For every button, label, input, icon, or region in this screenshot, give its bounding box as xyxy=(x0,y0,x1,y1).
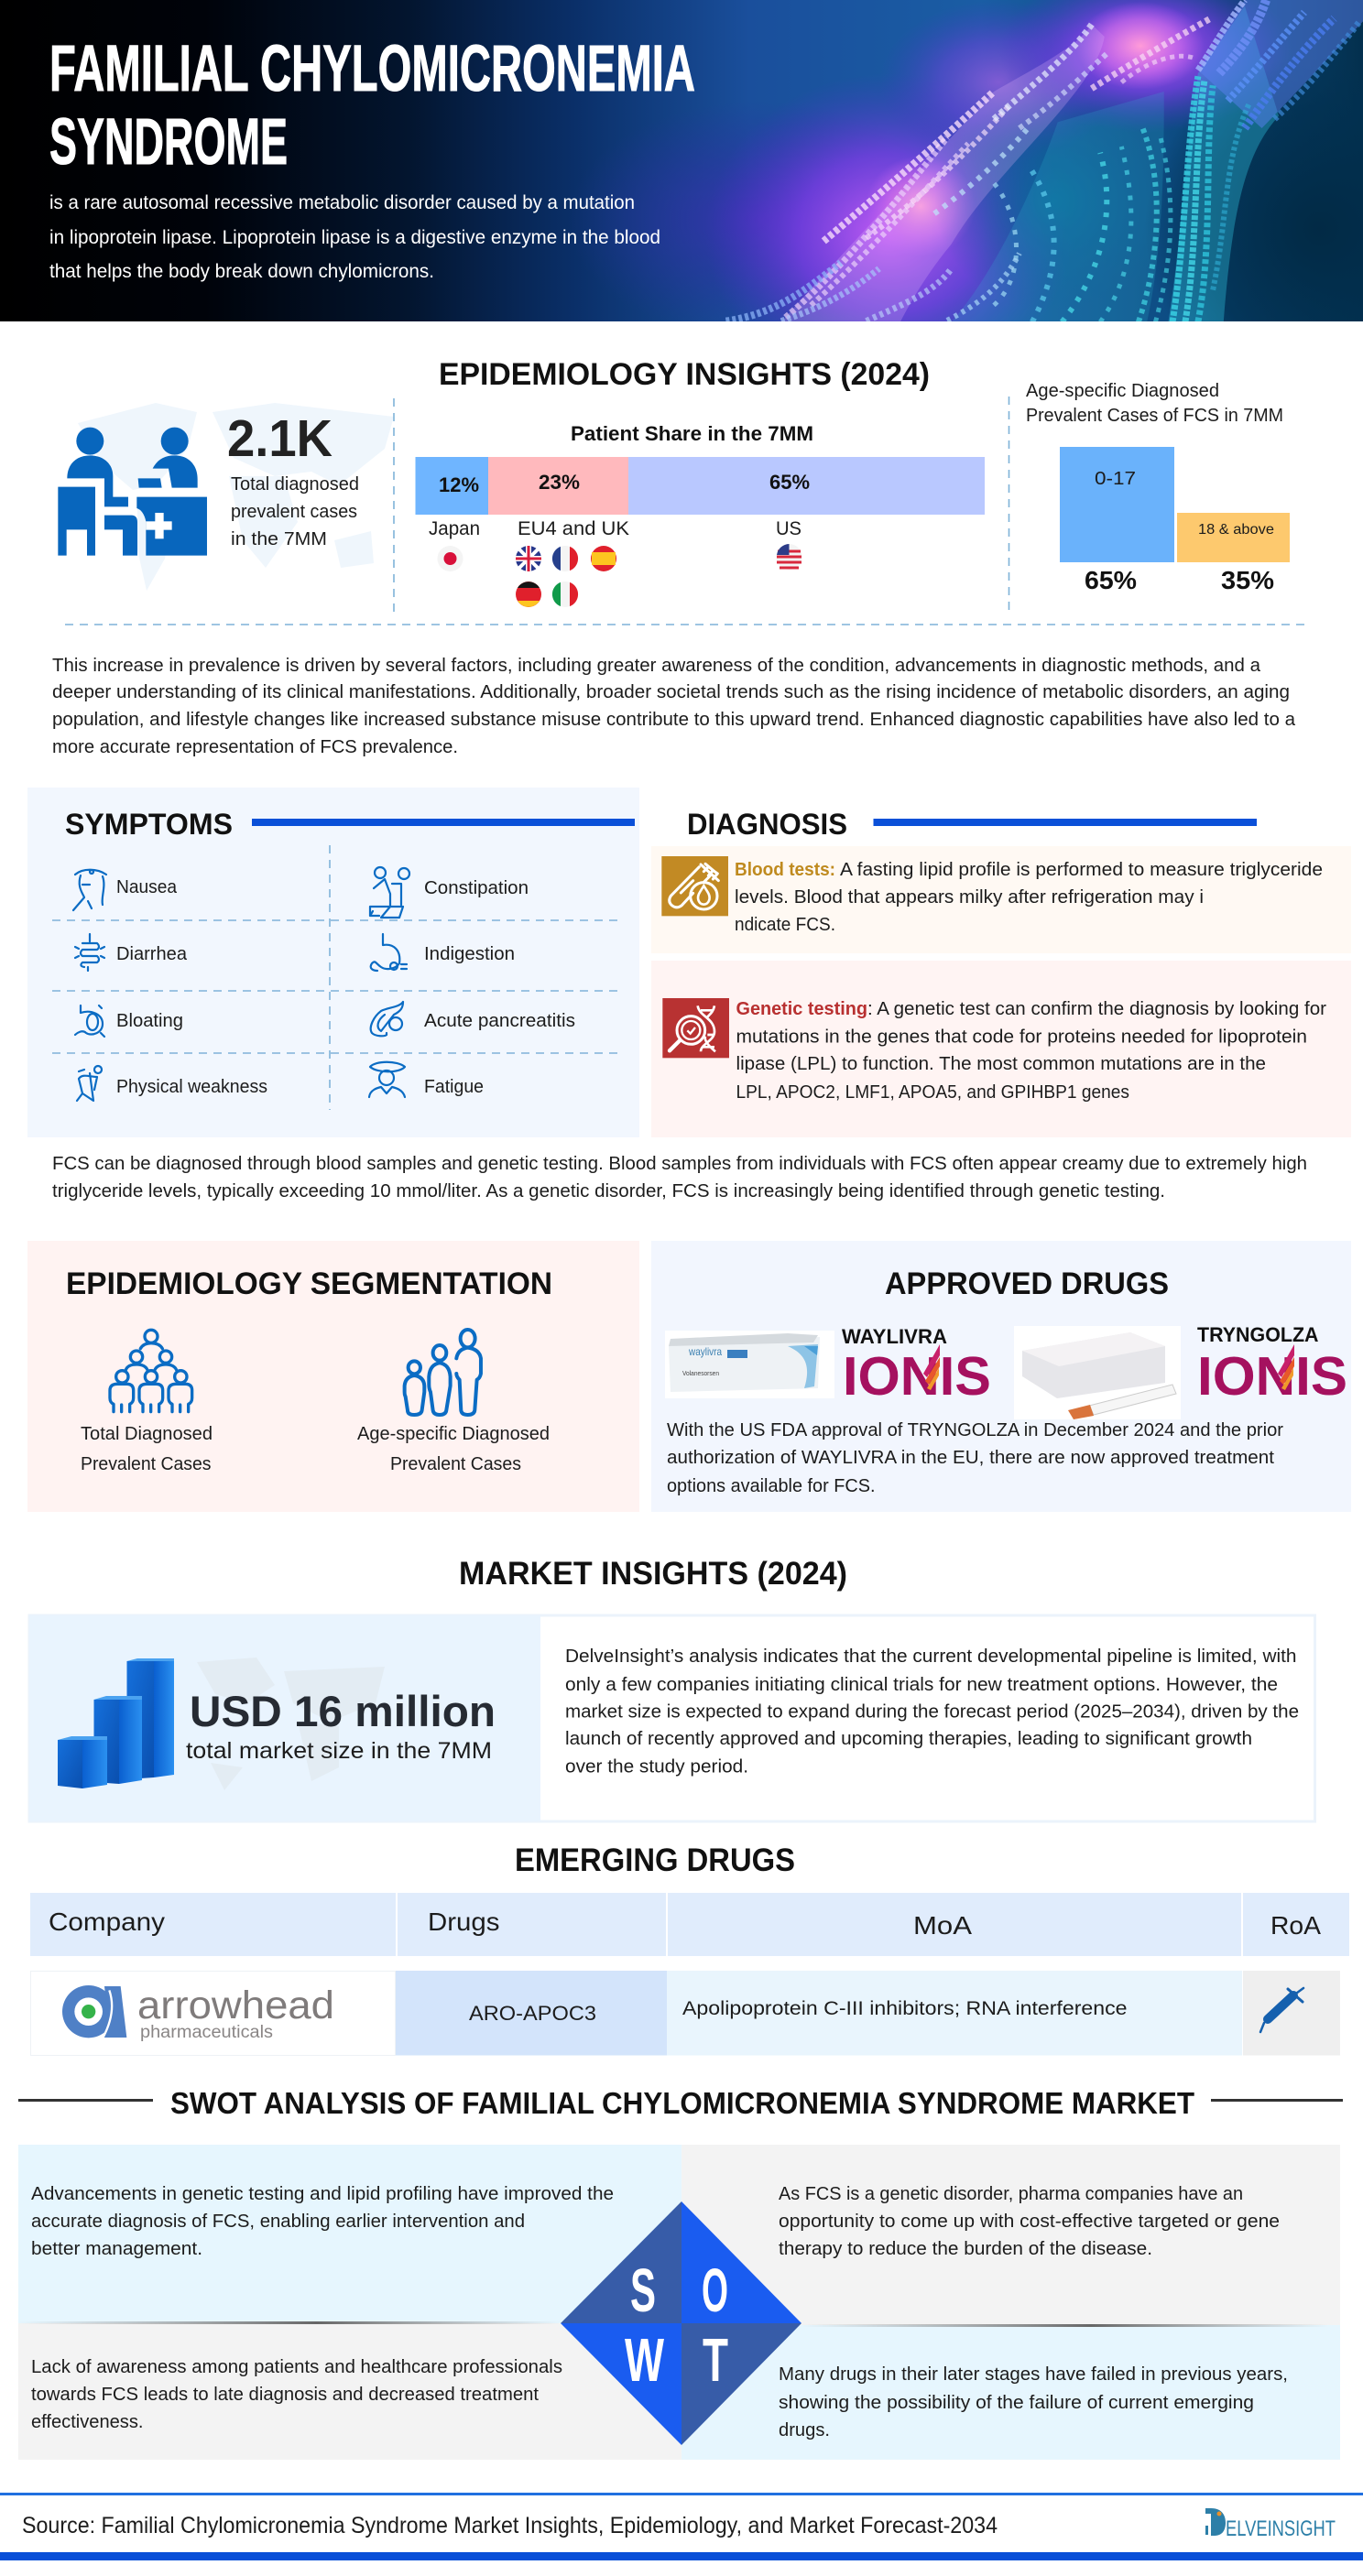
text: opportunities xyxy=(779,2184,1280,2259)
region labels: Japan xyxy=(429,518,480,539)
world map background xyxy=(197,1658,385,1790)
icon: syringe xyxy=(1260,1988,1303,2032)
table header: Drugs xyxy=(428,1908,500,1936)
text: weaknesses xyxy=(31,2357,562,2432)
logo: arrowhead xyxy=(62,1984,334,2042)
symptom: diarrhea xyxy=(75,934,188,971)
stat label: prevalent cases xyxy=(231,502,357,522)
intro text: is a rare autosomal recessive metabolic disorder caused by a mutation xyxy=(49,192,635,213)
text: threats xyxy=(779,2364,1288,2440)
text block: FCS diagnosis: triglyceride levels, typically exceeding 10 mmol/liter. As a genetic disorder, FCS is increasingly being identified through genetic testing. xyxy=(52,1181,1165,1201)
symptom: physical weakness xyxy=(77,1066,267,1101)
stacked bar: 23% xyxy=(539,471,580,494)
icon: doctor and patient at desk xyxy=(58,428,207,556)
bar chart: 0-17 xyxy=(1095,469,1136,489)
stacked bar: 12% xyxy=(439,473,479,496)
text: drug name: ARO-APOC3 xyxy=(469,2002,596,2025)
footer xyxy=(0,2493,1363,2560)
source line: Source: Familial Chylomicronemia Syndrome Market Insights, Epidemiology, and Market Forecast-2034 xyxy=(22,2513,998,2538)
symptom: constipation: Constipation xyxy=(424,878,529,898)
symptom: diarrhea: Diarrhea xyxy=(116,944,188,964)
bar chart: 18 & above xyxy=(1198,522,1274,538)
title: SYNDROME xyxy=(49,106,288,179)
title: FAMILIAL CHYLOMICRONEMIA xyxy=(49,33,695,105)
table row xyxy=(31,1971,1340,2055)
heading: age-specific: Age-specific Diagnosed xyxy=(1026,381,1219,401)
icon: blood test tube xyxy=(661,856,728,916)
text: threats: drugs. xyxy=(779,2420,830,2440)
intro text: in lipoprotein lipase. Lipoprotein lipase is a digestive enzyme in the blood xyxy=(49,227,660,248)
symptom: fatigue: Fatigue xyxy=(424,1077,484,1097)
drug: tryngolza box xyxy=(1014,1326,1181,1419)
SWOT diamond: O xyxy=(702,2256,728,2325)
heading: epidemiology insights: EPIDEMIOLOGY INSIGHTS (2024) xyxy=(439,357,930,392)
heading: SWOT analysis: SWOT ANALYSIS OF FAMILIAL CHYLOMICRONEMIA SYNDROME MARKET xyxy=(170,2086,1194,2120)
text: strengths: better management. xyxy=(31,2239,202,2259)
text block: prevalence drivers xyxy=(52,656,1296,757)
text: threats: Many drugs in their later stages have failed in previous years, xyxy=(779,2364,1288,2385)
icon: flag Italy xyxy=(552,582,578,607)
stat label: Total diagnosed xyxy=(231,474,359,495)
stat label: in the 7MM xyxy=(231,529,327,549)
text: genetic testing: LPL, APOC2, LMF1, APOA5, and GPIHBP1 genes xyxy=(736,1082,1129,1103)
panel: symptoms xyxy=(27,788,639,1137)
drug: waylivra box: Volanesorsen xyxy=(682,1371,719,1377)
region labels: EU4 and UK xyxy=(518,518,629,539)
heading: patient share: Patient Share in the 7MM xyxy=(571,422,813,445)
SWOT diamond: T xyxy=(703,2326,728,2395)
heading: emerging drugs: EMERGING DRUGS xyxy=(515,1842,795,1878)
panel: age-specific cases xyxy=(1026,381,1290,594)
heading: diagnosis: DIAGNOSIS xyxy=(687,808,847,841)
stat label: total market size in the 7MM xyxy=(186,1738,492,1764)
icon: DNA magnifier xyxy=(662,998,729,1058)
logo: ionis: IONIS xyxy=(1197,1346,1347,1407)
text: blood tests xyxy=(735,860,1323,935)
text block: FCS diagnosis xyxy=(52,1154,1307,1201)
label: age-specific diagnosed xyxy=(357,1424,550,1474)
panel: total diagnosed prevalent cases xyxy=(58,403,394,591)
text: strengths: Advancements in genetic testing and lipid profiling have improved the xyxy=(31,2184,614,2204)
text: tryngolza: TRYNGOLZA xyxy=(1197,1323,1319,1346)
region labels xyxy=(429,518,801,539)
text: blood tests: Blood tests: xyxy=(735,860,835,880)
stat: USD 16 million: USD 16 million xyxy=(190,1687,496,1735)
symptom: indigestion: Indigestion xyxy=(424,944,515,964)
label: age-specific diagnosed: Age-specific Diagnosed xyxy=(357,1424,550,1444)
text: threats: showing the possibility of the failure of current emerging xyxy=(779,2393,1254,2413)
text: market analysis: market size is expected to expand during the forecast period (2025–2034), driven by the xyxy=(565,1701,1299,1722)
icon: 3D bar chart xyxy=(58,1658,174,1788)
bottom bar xyxy=(0,2552,1363,2560)
symptom: bloating: Bloating xyxy=(116,1011,183,1031)
symptom: nausea xyxy=(73,870,178,910)
text: market analysis xyxy=(565,1647,1299,1777)
text: waylivra: WAYLIVRA xyxy=(842,1325,947,1348)
table header: RoA xyxy=(1270,1911,1321,1940)
label: age-specific diagnosed: Prevalent Cases xyxy=(390,1454,521,1474)
label: total diagnosed xyxy=(81,1424,213,1474)
text: weaknesses: effectiveness. xyxy=(31,2412,143,2432)
symptom: fatigue xyxy=(369,1062,484,1097)
intro text xyxy=(49,192,660,282)
text: genetic testing: mutations in the genes that code for proteins needed for lipoprotein xyxy=(736,1027,1307,1048)
text: market analysis: over the study period. xyxy=(565,1756,748,1777)
symptom: indigestion xyxy=(371,934,515,971)
table header: MoA xyxy=(913,1911,972,1940)
text: market analysis: only a few companies initiating clinical trials for new treatment options. However, the xyxy=(565,1675,1278,1695)
icon: flag France xyxy=(552,546,578,571)
stacked bar: 65% xyxy=(769,471,810,494)
panel: genetic testing xyxy=(651,961,1351,1137)
logo: DelveInsight xyxy=(1205,2508,1336,2541)
symptom: bloating xyxy=(75,1005,183,1037)
drug: waylivra box xyxy=(665,1331,834,1398)
symptom: acute pancreatitis xyxy=(371,1002,575,1036)
panel: market insights xyxy=(29,1615,1315,1821)
intro text: that helps the body break down chylomicrons. xyxy=(49,261,434,282)
icon: flag Spain xyxy=(591,546,616,571)
text: genetic testing: : A genetic test can confirm the diagnosis by looking for xyxy=(867,999,1326,1019)
text: blood tests: A fasting lipid profile is performed to measure triglyceride xyxy=(840,860,1323,880)
logo: arrowhead: pharmaceuticals xyxy=(140,2023,273,2042)
logo: ionis: IONIS xyxy=(843,1346,991,1407)
text: genetic testing: lipase (LPL) to function. The most common mutations are in the xyxy=(736,1054,1266,1074)
stacked bar xyxy=(416,457,985,515)
table header xyxy=(30,1893,1349,1956)
icon: flag Germany xyxy=(516,582,541,607)
text: blood tests: ndicate FCS. xyxy=(735,915,835,935)
heading: symptoms: SYMPTOMS xyxy=(65,808,233,841)
region labels: US xyxy=(776,518,801,539)
stat: 2.1K: 2.1K xyxy=(227,409,333,468)
text: weaknesses: towards FCS leads to late diagnosis and decreased treatment xyxy=(31,2385,539,2405)
text: market analysis: DelveInsight’s analysis indicates that the current developmental pipeline is limited, with xyxy=(565,1647,1297,1667)
stat label xyxy=(231,474,359,549)
SWOT diamond: W xyxy=(625,2326,665,2395)
text: market analysis: launch of recently approved and upcoming therapies, leading to significant growth xyxy=(565,1729,1252,1749)
text: approved drugs: With the US FDA approval of TRYNGOLZA in December 2024 and the prior xyxy=(667,1420,1283,1440)
header banner xyxy=(0,0,1363,321)
text: weaknesses: Lack of awareness among patients and healthcare professionals xyxy=(31,2357,562,2377)
text: moa: Apolipoprotein C-III inhibitors; RNA interference xyxy=(682,1998,1127,2019)
panel: approved drugs xyxy=(651,1241,1351,1512)
title xyxy=(49,33,695,179)
bar chart: 65% xyxy=(1085,566,1137,594)
heading: age-specific xyxy=(1026,381,1283,426)
heading: age-specific: Prevalent Cases of FCS in 7MM xyxy=(1026,406,1283,426)
text: approved drugs xyxy=(667,1420,1283,1496)
text: genetic testing xyxy=(736,999,1326,1103)
SWOT diamond xyxy=(561,2201,801,2445)
bar chart xyxy=(1060,447,1290,594)
DNA strand artwork xyxy=(601,0,1363,321)
label: total diagnosed: Total Diagnosed xyxy=(81,1424,213,1444)
SWOT diamond: S xyxy=(630,2256,656,2325)
bar chart: 35% xyxy=(1221,566,1274,594)
text block: FCS diagnosis: FCS can be diagnosed through blood samples and genetic testing. Blood samples from individuals with FCS often appear creamy due to extremely high xyxy=(52,1154,1307,1174)
icon: flag US xyxy=(777,544,802,570)
text: approved drugs: options available for FCS. xyxy=(667,1476,876,1496)
table: emerging drugs xyxy=(30,1893,1349,2055)
panel: patient share xyxy=(416,422,985,607)
icon: population group xyxy=(110,1330,192,1412)
icon: age groups xyxy=(405,1330,481,1415)
text: strengths xyxy=(31,2184,614,2259)
text block: prevalence drivers: This increase in prevalence is driven by several factors, including greater awareness of the condition, advancements in diagnostic methods, and a xyxy=(52,656,1261,676)
text: strengths: accurate diagnosis of FCS, enabling earlier intervention and xyxy=(31,2212,525,2232)
text block: prevalence drivers: population, and lifestyle changes like increased substance misuse contribute to this upward trend. Enhanced diagnostic capabilities have also led to a xyxy=(52,710,1296,730)
panel: SWOT matrix xyxy=(18,2145,1340,2460)
icon: flag UK xyxy=(516,546,541,571)
text block: prevalence drivers: deeper understanding of its clinical manifestations. Additionally, broader societal trends such as the rising incidence of metabolic disorders, an aging xyxy=(52,682,1290,702)
heading: symptoms xyxy=(65,808,635,841)
logo: arrowhead: arrowhead xyxy=(137,1984,334,2027)
heading: diagnosis xyxy=(687,808,1257,841)
panel: blood tests xyxy=(651,846,1351,953)
text: opportunities: therapy to reduce the burden of the disease. xyxy=(779,2239,1152,2259)
symptom: acute pancreatitis: Acute pancreatitis xyxy=(424,1011,575,1031)
symptom: physical weakness: Physical weakness xyxy=(116,1077,267,1097)
world map background xyxy=(78,403,394,591)
drug: waylivra box: waylivra xyxy=(688,1345,722,1358)
panel: epidemiology segmentation xyxy=(27,1241,639,1512)
text: blood tests: levels. Blood that appears milky after refrigeration may i xyxy=(735,887,1204,908)
symptom: constipation xyxy=(370,867,529,918)
symptom: nausea: Nausea xyxy=(116,877,178,897)
heading: approved drugs: APPROVED DRUGS xyxy=(885,1266,1169,1301)
label: total diagnosed: Prevalent Cases xyxy=(81,1454,211,1474)
heading: epidemiology segmentation: EPIDEMIOLOGY SEGMENTATION xyxy=(66,1266,552,1301)
text block: prevalence drivers: more accurate representation of FCS prevalence. xyxy=(52,737,458,757)
table header: Company xyxy=(49,1908,165,1936)
text: genetic testing: Genetic testing xyxy=(736,999,867,1019)
text: approved drugs: authorization of WAYLIVRA in the EU, there are now approved treatment xyxy=(667,1448,1274,1468)
heading: market insights: MARKET INSIGHTS (2024) xyxy=(459,1556,847,1592)
text: opportunities: opportunity to come up with cost-effective targeted or gene xyxy=(779,2212,1280,2232)
text: opportunities: As FCS is a genetic disorder, pharma companies have an xyxy=(779,2184,1243,2204)
icon: flag Japan xyxy=(438,546,463,571)
